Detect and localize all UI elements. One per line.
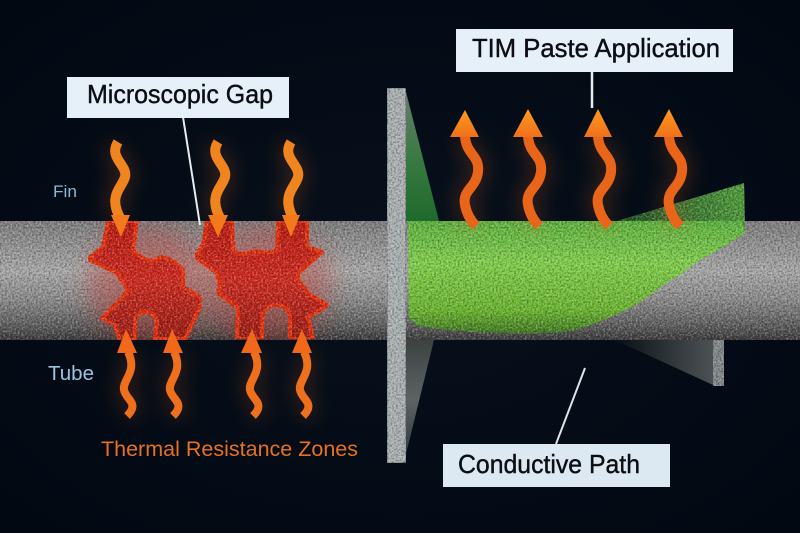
label: Microscopic Gap: Microscopic Gap <box>87 79 273 109</box>
arrow: upper 1 <box>111 142 130 237</box>
arrow: right 4 <box>654 109 683 226</box>
label: Tube: Tube <box>48 363 94 385</box>
thermal resistance zone: right gap <box>195 221 328 339</box>
leader line: TIM paste <box>591 72 593 108</box>
tube <box>0 221 800 340</box>
arrow: right 2 <box>513 109 543 226</box>
arrow: lower 2 <box>163 329 183 416</box>
heat arrows: lower left, pointing up <box>117 329 312 417</box>
red glow on tube <box>88 227 331 343</box>
label: Conductive Path: Conductive Path <box>458 449 640 479</box>
label: Microscopic Gap <box>67 77 289 118</box>
label: TIM Paste Application: TIM Paste Application <box>472 33 720 63</box>
thermal resistance zone: left gap <box>88 221 202 340</box>
arrow: upper 3 <box>282 142 300 237</box>
label: Conductive Path <box>443 444 670 487</box>
leader line: conductive path <box>556 368 585 444</box>
label: TIM Paste Application <box>456 29 733 72</box>
arrow: lower 4 <box>292 329 312 416</box>
heat arrows: upper left, pointing into the gaps <box>111 142 300 237</box>
arrow: lower 1 <box>117 329 137 416</box>
arrow: upper 2 <box>208 142 228 237</box>
TIM paste body <box>408 221 745 334</box>
arrow: right 3 <box>584 109 612 226</box>
label: Fin: Fin <box>53 182 77 201</box>
TIM paste flap <box>617 183 745 240</box>
label: Thermal Resistance Zones: Thermal Resistance Zones <box>101 438 358 461</box>
back fin: upper, lower and small right fin <box>405 88 724 458</box>
fin: front plate <box>387 88 406 463</box>
leader line: microscopic gap <box>183 117 200 225</box>
arrow: right 1 <box>450 110 479 226</box>
arrow: lower 3 <box>241 329 262 416</box>
heat arrows: right side, rising through the paste <box>450 109 683 227</box>
